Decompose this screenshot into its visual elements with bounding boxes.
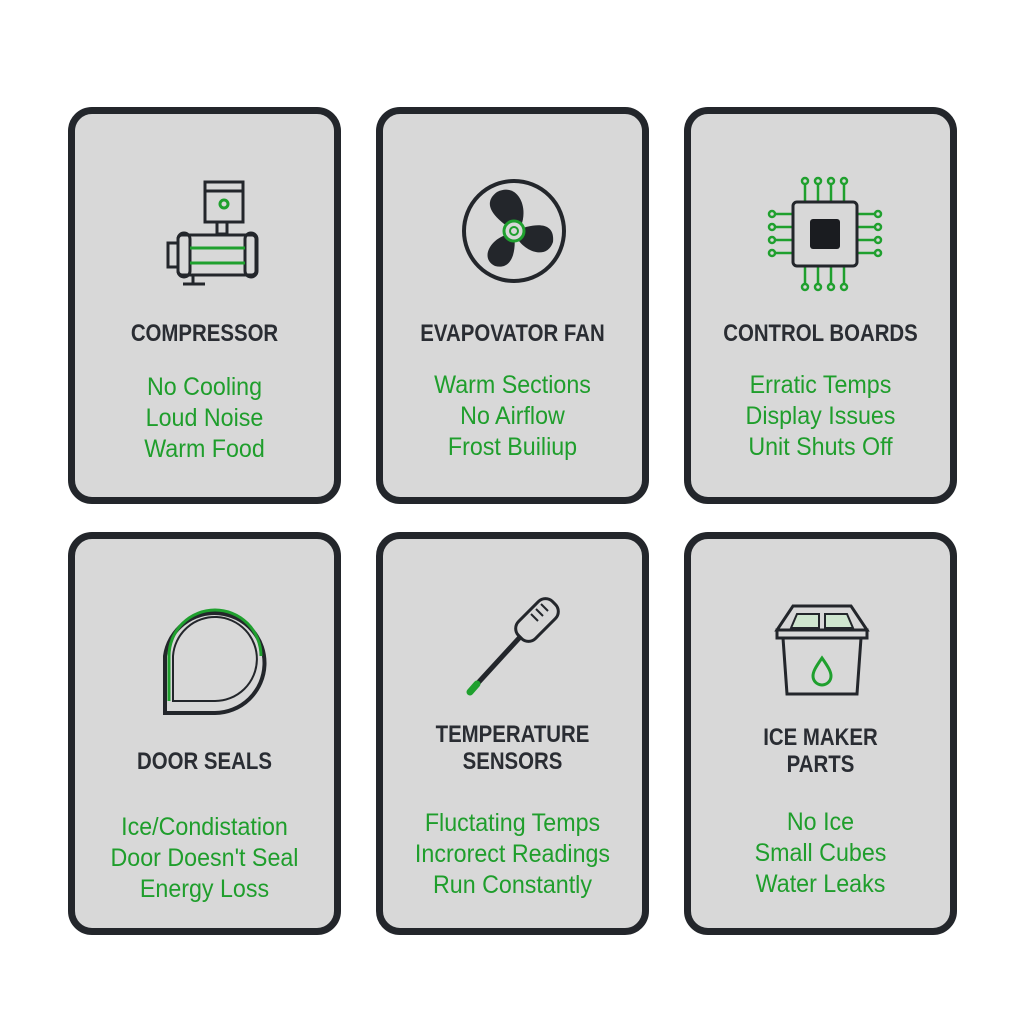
symptoms — [746, 371, 895, 461]
title: DOOR SEALS — [137, 748, 272, 775]
symptoms: Loud Noise — [146, 404, 263, 432]
icon: probe — [466, 597, 560, 696]
symptoms: No Airflow — [460, 402, 565, 430]
symptoms: Frost Builiup — [448, 433, 577, 461]
symptoms — [434, 371, 591, 461]
title: SENSORS — [463, 748, 562, 775]
symptoms — [755, 808, 886, 898]
icon: compressor — [166, 180, 258, 286]
symptoms: No Ice — [787, 808, 854, 836]
title: CONTROL BOARDS — [723, 320, 918, 347]
title: PARTS — [787, 751, 854, 778]
symptoms: Ice/Condistation — [121, 813, 288, 841]
symptoms: Incrorect Readings — [415, 840, 610, 868]
card: compressor — [68, 107, 341, 504]
symptoms: Run Constantly — [433, 871, 592, 899]
symptoms: Energy Loss — [140, 875, 269, 903]
title: ICE MAKER — [763, 724, 878, 751]
icon: fan — [462, 179, 566, 283]
symptoms: Fluctating Temps — [425, 809, 600, 837]
symptoms — [144, 373, 265, 463]
title: COMPRESSOR — [131, 320, 278, 347]
card: ice maker parts — [684, 532, 957, 935]
icon: door seal — [163, 608, 266, 715]
symptoms: Unit Shuts Off — [748, 433, 893, 461]
title: EVAPOVATOR FAN — [420, 320, 605, 347]
symptoms: No Cooling — [147, 373, 262, 401]
symptoms — [111, 813, 298, 903]
symptoms: Warm Sections — [434, 371, 591, 399]
symptoms: Erratic Temps — [750, 371, 891, 399]
title — [436, 721, 589, 775]
symptoms: Water Leaks — [756, 870, 885, 898]
symptoms: Warm Food — [144, 435, 265, 463]
card: evaporator fan — [376, 107, 649, 504]
card: temperature sensors — [376, 532, 649, 935]
symptoms — [415, 809, 610, 899]
icon: ice bin — [774, 604, 870, 696]
icon: chip — [768, 176, 882, 292]
card: door seals — [68, 532, 341, 935]
title: TEMPERATURE — [436, 721, 589, 748]
symptoms: Small Cubes — [755, 839, 886, 867]
symptoms: Display Issues — [746, 402, 895, 430]
title — [763, 724, 878, 778]
symptoms: Door Doesn't Seal — [111, 844, 298, 872]
card: control boards — [684, 107, 957, 504]
